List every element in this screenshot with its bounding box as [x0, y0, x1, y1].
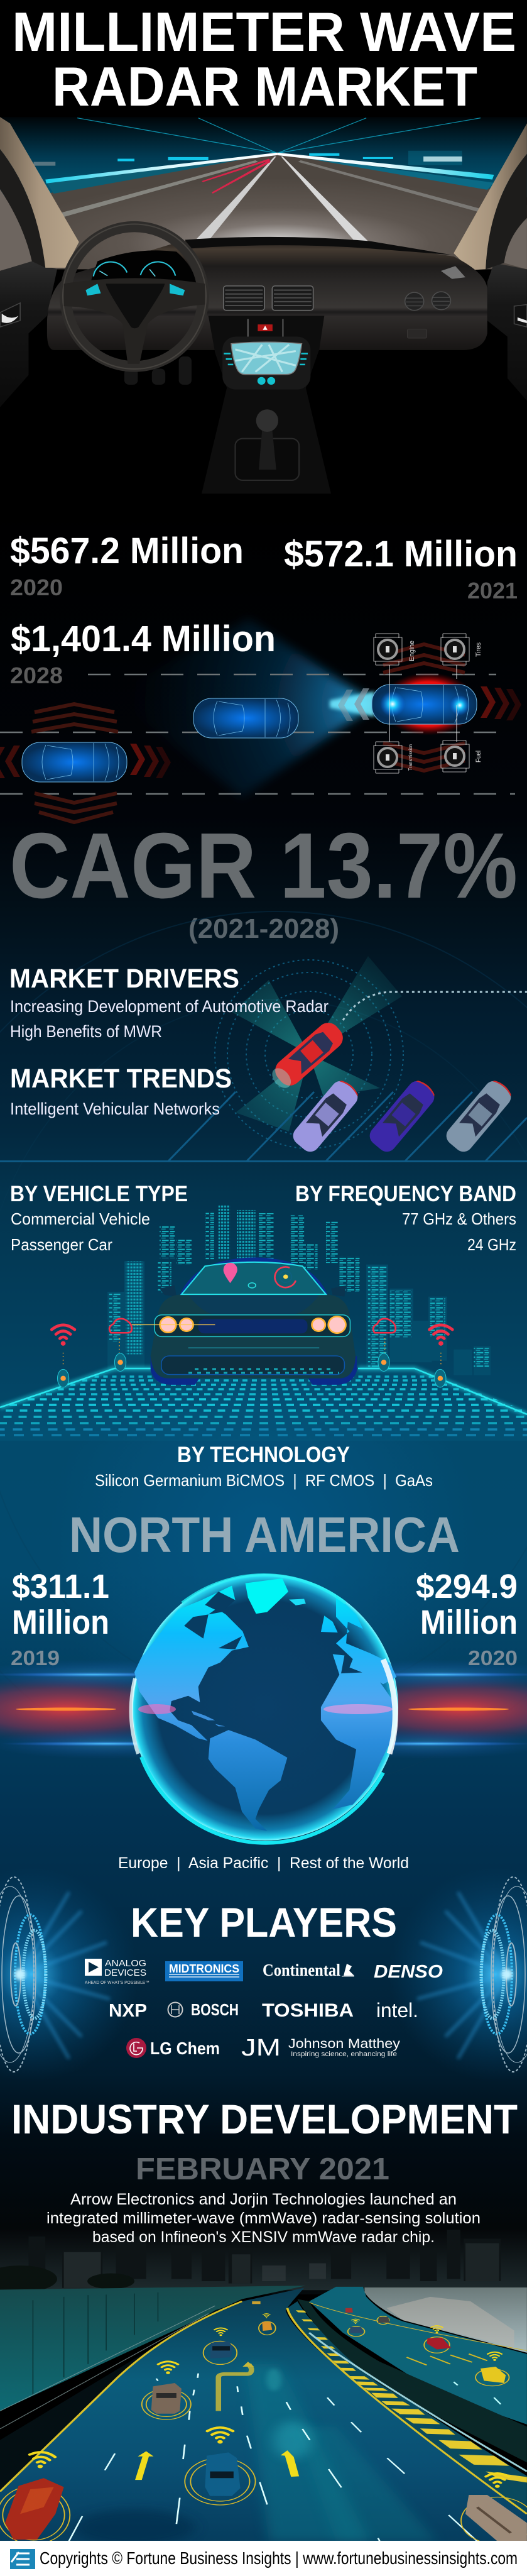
market drivers: Increasing Development of Automotive Radar	[10, 997, 329, 1016]
globe	[131, 1574, 398, 1843]
floor over bumper	[188, 1369, 339, 1373]
gauge labels: Fuel	[475, 751, 482, 762]
title: MILLIMETER WAVE	[12, 1, 516, 63]
light streaks	[33, 151, 494, 194]
car: middle	[193, 698, 298, 738]
logo: Analog Devices: ANALOG	[105, 1958, 146, 1969]
by technology: BY TECHNOLOGY	[177, 1443, 350, 1467]
logo: Intel: intel.	[376, 1999, 418, 2022]
hood	[188, 1295, 319, 1315]
radar scene: drivers	[0, 911, 527, 1792]
smart city car scene	[0, 1205, 527, 1441]
skyline	[0, 2230, 527, 2293]
north america values: left: $311.1	[12, 1568, 109, 1605]
logo: LG Chem: LG Chem	[150, 2039, 220, 2058]
development description: Arrow Electronics and Jorjin Technologies launched an	[70, 2191, 457, 2208]
gauge: fuel	[441, 740, 469, 772]
dotted route	[343, 992, 527, 1020]
footer logo	[10, 2549, 35, 2569]
laser line	[131, 1324, 215, 1326]
left wall	[0, 2286, 306, 2411]
north america values: left	[11, 1568, 109, 1670]
radar target	[274, 1267, 296, 1287]
body	[151, 1294, 356, 1379]
logo: Analog Devices: AHEAD OF WHAT'S POSSIBLE™	[85, 1979, 149, 1985]
development description: integrated millimeter-wave (mmWave) radar-sensing solution	[46, 2210, 481, 2227]
bumper vent	[161, 1356, 344, 1375]
instrument cluster	[90, 250, 197, 283]
wall guard rails	[0, 2306, 215, 2429]
title: RADAR MARKET	[52, 55, 477, 118]
pedals	[124, 356, 192, 385]
market size: 2028: 2028	[10, 663, 63, 688]
logo: Analog Devices	[85, 1958, 149, 1985]
map pin	[224, 1263, 237, 1283]
logo: Midtronics	[165, 1961, 243, 1981]
right vent grille	[441, 266, 465, 279]
rear red waves: lower car	[31, 704, 118, 822]
wall panel seams	[33, 2293, 158, 2396]
mirrors	[160, 1285, 346, 1297]
headlight beams	[134, 619, 374, 797]
radar car scene	[0, 619, 521, 822]
gauge: tires	[441, 634, 469, 665]
median hatching	[287, 2301, 527, 2514]
background arcs	[0, 911, 527, 1792]
market drivers: High Benefits of MWR	[10, 1022, 162, 1041]
logo: LG Chem	[126, 2038, 220, 2058]
key players logos	[85, 1958, 443, 2061]
logo: Bosch	[168, 2000, 239, 2019]
north america values: right: $294.9	[416, 1568, 518, 1605]
car interior illustration	[0, 117, 527, 493]
side windows	[0, 189, 527, 271]
right pillar	[454, 123, 527, 270]
by vehicle type: Commercial Vehicle	[11, 1209, 150, 1228]
right road	[309, 2287, 527, 2425]
logo: Toshiba: TOSHIBA	[262, 2000, 354, 2021]
vehicles	[5, 2301, 527, 2541]
curved route arrow	[219, 2364, 251, 2411]
windshield	[182, 1262, 326, 1294]
gauge labels: Engine	[408, 641, 416, 661]
headlights	[160, 1316, 346, 1333]
tyres	[151, 1356, 357, 1385]
floor edges	[0, 1368, 527, 1414]
background gradient	[0, 503, 527, 2294]
center console	[202, 316, 331, 493]
market size: 2021	[284, 534, 518, 603]
car: grey-blue	[443, 1076, 516, 1155]
gauge: engine	[374, 634, 402, 665]
left chevrons	[0, 746, 20, 778]
north america values: right	[416, 1568, 518, 1670]
wifi icons	[27, 2314, 509, 2488]
by technology: Silicon Germanium BiCMOS | RF CMOS | GaAs	[95, 1471, 433, 1490]
radar beams	[232, 956, 402, 1131]
key players heading: KEY PLAYERS	[131, 1899, 397, 1946]
footer	[0, 2541, 527, 2576]
development description: based on Infineon's XENSIV mmWave radar chip.	[92, 2228, 435, 2246]
logo: Johnson Matthey: Inspiring science, enhancing life	[291, 2050, 397, 2058]
market size: 2021: $572.1 Million	[284, 534, 518, 575]
road	[0, 153, 527, 269]
dark pillar trim	[0, 149, 527, 269]
hazard button	[248, 319, 283, 337]
logo: Johnson Matthey	[241, 2035, 401, 2061]
steering wheel	[63, 224, 206, 369]
glovebox handle	[407, 329, 426, 338]
front chevrons	[338, 688, 369, 721]
center vents	[224, 286, 313, 311]
logo: Johnson Matthey: Johnson Matthey	[288, 2037, 401, 2051]
door panels	[0, 261, 527, 407]
globe highlights	[131, 1575, 395, 1843]
hedge median	[297, 2299, 527, 2462]
HUD decoration: right	[389, 1868, 527, 2081]
logo: Analog Devices: DEVICES	[104, 1968, 146, 1978]
red car	[267, 1018, 347, 1094]
flare bands	[0, 1660, 527, 1759]
market size: 2028: $1,401.4 Million	[11, 619, 276, 659]
round vents	[405, 292, 450, 311]
gear shifter	[235, 409, 299, 480]
background glow: region	[50, 1314, 477, 1766]
car: rear	[22, 742, 127, 782]
navigation screen	[222, 337, 310, 390]
city skyline	[107, 1205, 491, 1375]
windshield sky	[0, 117, 527, 197]
continents	[134, 1578, 396, 1831]
by technology	[95, 1443, 433, 1490]
by vehicle type: BY VEHICLE TYPE	[10, 1182, 188, 1206]
north america heading: NORTH AMERICA	[69, 1507, 460, 1563]
cloud: left	[109, 1319, 396, 1333]
logo: Johnson Matthey: JM	[241, 2035, 281, 2061]
light panel	[155, 1315, 350, 1336]
north america values: right: 2020	[468, 1646, 518, 1670]
development description	[46, 2191, 481, 2246]
radar rings	[215, 960, 403, 1148]
gauge labels	[408, 641, 482, 771]
grille	[198, 1319, 308, 1333]
market size: 2020: $567.2 Million	[10, 531, 244, 571]
market size: 2028	[10, 619, 276, 688]
car: indigo	[366, 1076, 439, 1155]
lane markings	[0, 157, 527, 241]
car: main	[372, 685, 477, 724]
highway scene	[0, 2230, 527, 2545]
title	[12, 1, 516, 118]
CAGR heading: (2021-2028)	[188, 913, 339, 944]
wifi: right	[430, 1325, 452, 1346]
market trends	[10, 1064, 232, 1118]
market size: 2020: 2020	[10, 575, 63, 600]
road edge lines	[0, 2301, 527, 2514]
nodes	[57, 1353, 446, 1387]
development date: FEBRUARY 2021	[136, 2152, 389, 2186]
rear chevrons	[130, 686, 521, 778]
red waves: main car	[383, 644, 465, 771]
logo: Bosch: BOSCH	[191, 2000, 239, 2019]
dashboard	[47, 238, 487, 350]
divider line	[0, 1160, 527, 1162]
north america values: right: Million	[420, 1604, 518, 1641]
HUD decoration: left	[0, 1868, 138, 2081]
road highlights	[246, 2364, 369, 2541]
left pillar	[0, 117, 79, 268]
logo: Continental: Continental	[263, 1961, 340, 1979]
main road	[0, 2288, 527, 2541]
market size: 2020	[10, 531, 244, 600]
dash top edge	[185, 237, 452, 255]
roof	[180, 1257, 328, 1295]
slanted road lines	[168, 1092, 527, 1161]
car: lavender	[290, 1076, 362, 1155]
by frequency band: 77 GHz & Others	[402, 1209, 516, 1228]
radar sensor dots	[380, 691, 470, 717]
red glow	[379, 673, 477, 735]
other regions: Europe | Asia Pacific | Rest of the World	[118, 1854, 409, 1872]
right lane marks	[406, 2354, 487, 2365]
arrows	[135, 2450, 299, 2480]
north america values: left: Million	[12, 1604, 109, 1641]
logo: Denso: DENSO	[374, 1962, 443, 1982]
by frequency band: 24 GHz	[467, 1235, 516, 1254]
logo: Midtronics: MIDTRONICS	[169, 1962, 239, 1975]
connectivity icons	[52, 1319, 452, 1387]
light rays	[77, 118, 481, 153]
market trends: Intelligent Vehicular Networks	[10, 1099, 220, 1118]
market trends: MARKET TRENDS	[10, 1064, 232, 1094]
gauge: transmission	[374, 742, 402, 773]
gauge labels: Tires	[475, 642, 482, 657]
car front	[131, 1257, 357, 1385]
market drivers	[9, 964, 329, 1041]
glowing floor	[0, 1369, 527, 1441]
sensor connectors	[389, 665, 457, 742]
by vehicle type	[10, 1182, 188, 1254]
market drivers: MARKET DRIVERS	[9, 964, 239, 994]
market size: 2021: 2021	[467, 578, 518, 603]
wifi: left	[52, 1325, 75, 1346]
logo: NXP: NXP	[109, 2001, 147, 2021]
road dashes	[0, 674, 515, 794]
verge	[0, 2304, 235, 2492]
north america values: left: 2019	[11, 1646, 60, 1670]
right wall	[364, 2287, 527, 2353]
by frequency band	[295, 1182, 516, 1254]
gauge labels: Transmission	[408, 744, 413, 771]
rings	[0, 2316, 527, 2544]
by vehicle type: Passenger Car	[11, 1235, 112, 1254]
lane dashes	[69, 2374, 501, 2541]
